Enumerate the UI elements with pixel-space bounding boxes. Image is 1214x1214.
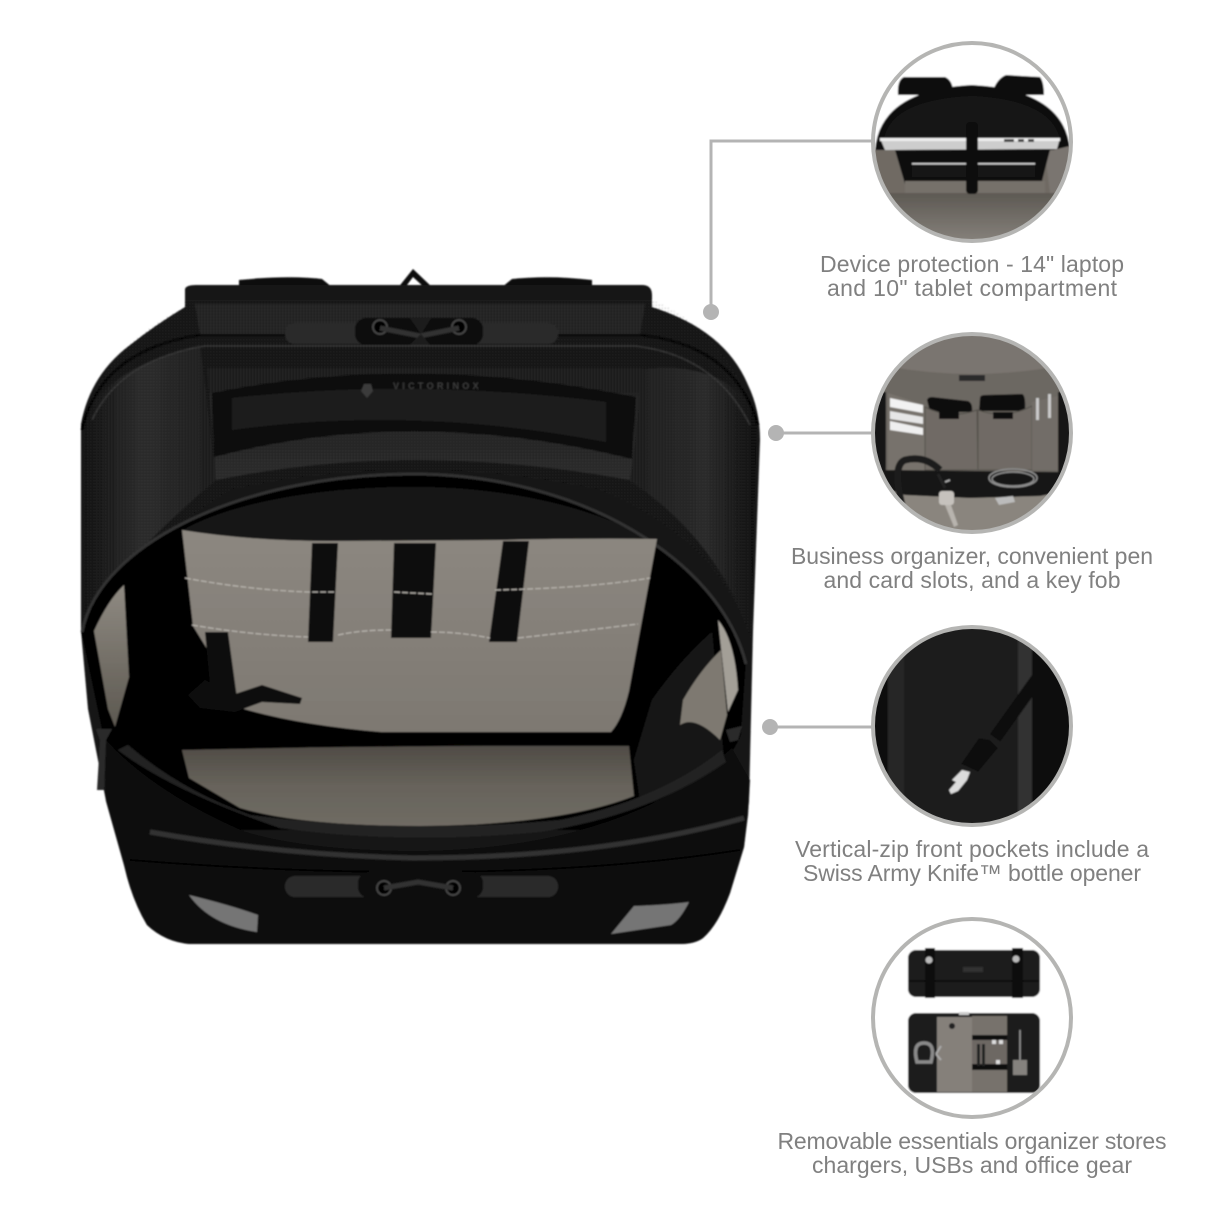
lanyard strap <box>995 675 1040 738</box>
caption 2 <box>791 543 1153 593</box>
bottle opener <box>949 770 970 794</box>
callout line 2 <box>768 425 874 441</box>
logo tag <box>959 375 985 381</box>
bottom reflective patches <box>189 895 689 934</box>
detail circle: vertical zip pocket with opener <box>870 625 1074 829</box>
caption 1: Device protection - 14" laptop <box>820 251 1124 277</box>
weave texture <box>84 300 757 640</box>
bottom zipper with pulls <box>285 872 558 898</box>
shoulder straps <box>898 75 1044 95</box>
lower panel <box>890 192 1054 239</box>
backpack illustration <box>81 269 760 944</box>
pen pocket <box>1032 406 1033 470</box>
grey back panel <box>182 530 657 732</box>
panel stitching <box>185 578 650 638</box>
caption 2: and card slots, and a key fob <box>824 567 1120 593</box>
detail circle: laptop compartment <box>870 40 1074 253</box>
left side pocket lining <box>94 585 129 727</box>
elastic pen straps <box>308 541 529 642</box>
side zip pulls <box>96 726 742 790</box>
front zipper stripe <box>150 818 744 858</box>
pocket band <box>905 181 1045 194</box>
connector clip <box>936 1046 941 1060</box>
retaining strap <box>966 122 978 194</box>
key fob strap <box>188 632 302 712</box>
lip binding <box>118 745 726 838</box>
coiled cable <box>989 469 1037 487</box>
callout line 3 <box>762 719 874 735</box>
right side mesh pocket <box>634 620 738 800</box>
leather grab handle <box>212 373 636 459</box>
caption 3: Swiss Army Knife™ bottle opener <box>803 860 1141 886</box>
caption 4 <box>778 1128 1166 1178</box>
detail circle: removable organizer <box>870 915 1074 1119</box>
lower panel <box>894 490 1048 530</box>
upper flap <box>900 336 1044 374</box>
snap <box>949 1023 955 1029</box>
centre fabric panel <box>207 368 643 480</box>
tucked card <box>995 496 1015 505</box>
side columns <box>875 680 887 772</box>
caption 2: Business organizer, convenient pen <box>791 543 1153 569</box>
left side fabric <box>84 345 216 625</box>
zipper arc <box>82 474 746 664</box>
right side fabric <box>629 368 757 640</box>
caption 4: Removable essentials organizer stores <box>778 1128 1166 1154</box>
top panel seam <box>82 335 758 430</box>
caption 4: chargers, USBs and office gear <box>812 1152 1132 1178</box>
phone pockets <box>925 407 978 470</box>
top straps and grab loop <box>239 269 592 292</box>
backpack body silhouette <box>81 285 760 944</box>
tablet <box>912 166 1035 177</box>
strap loop <box>898 459 940 505</box>
caption 1 <box>820 251 1124 301</box>
side shadows <box>875 392 886 472</box>
floor of compartment <box>182 746 634 826</box>
callout line 1 <box>703 141 874 320</box>
rolled organizer <box>908 948 1040 998</box>
tablet pocket <box>895 150 1050 184</box>
caption 3 <box>795 836 1149 886</box>
leather grab handle: VICTORINOX <box>393 381 479 391</box>
top zipper with pulls <box>285 318 558 345</box>
keys <box>938 474 958 527</box>
detail circle: business organizer <box>870 330 1074 540</box>
card slots <box>888 393 925 470</box>
grey side walls <box>904 178 905 179</box>
upper lining mesh <box>182 487 657 548</box>
dark key band <box>882 470 1062 498</box>
front flap lower lip <box>104 738 750 944</box>
laptop sleeve interior <box>875 85 1070 150</box>
top band weave <box>195 304 645 334</box>
laptop <box>880 138 1060 150</box>
caption 1: and 10" tablet compartment <box>827 275 1118 301</box>
main compartment opening <box>81 473 746 830</box>
caption 3: Vertical-zip front pockets include a <box>795 836 1149 862</box>
opened organizer <box>908 1012 1040 1093</box>
cable coil <box>916 1043 932 1062</box>
buckle <box>962 739 997 771</box>
phones <box>927 397 972 412</box>
USB hub <box>1013 1060 1027 1075</box>
lower bag body <box>876 148 1054 194</box>
